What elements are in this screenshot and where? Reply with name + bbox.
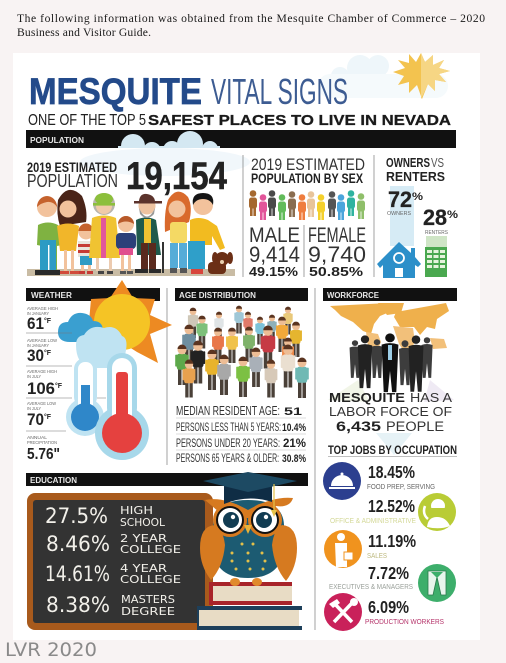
icon: suit jacket (418, 564, 456, 602)
weather statistics: °F (44, 317, 52, 325)
intro text: The following information was obtained from the Mesquite Chamber of Commerce – 2020 (17, 12, 485, 25)
chalkboard: 27.5% (45, 504, 108, 528)
chalkboard: MASTERS (121, 594, 175, 606)
job: office: OFFICE & ADMINISTRATIVE (330, 518, 416, 525)
title: MESQUITE (29, 71, 202, 112)
red thermometer (95, 353, 149, 460)
girl (116, 216, 136, 274)
books (197, 582, 302, 630)
weather statistics: AVERAGE LOW (27, 338, 58, 343)
age statistics (176, 404, 306, 465)
illustration: world map with workers: 6,435 (336, 419, 382, 434)
blue thermometer (66, 358, 104, 436)
panel: population by sex: 49.15% (249, 264, 298, 279)
job: sales: SALES (367, 553, 387, 560)
grandfather (134, 194, 164, 273)
chalkboard: SCHOOL (120, 517, 165, 529)
panel: owners vs renters: % (447, 209, 458, 221)
icon: salesperson with case (324, 530, 362, 568)
weather statistics: IN JANUARY (27, 343, 49, 348)
icon: hammer and wrench (324, 593, 362, 631)
intro text (17, 12, 485, 39)
illustration: world map with workers: PEOPLE (386, 419, 444, 434)
icons: small people row (249, 190, 365, 220)
job: food prep (323, 462, 435, 500)
chalkboard: 2 YEAR (120, 533, 167, 545)
illustration: world map with workers (328, 303, 454, 455)
faint triangles (328, 380, 454, 455)
woman in stripes (165, 192, 191, 273)
weather statistics: ANNUAL (27, 435, 47, 440)
world map (330, 303, 449, 356)
chalkboard: 8.38% (46, 593, 110, 617)
chalkboard: COLLEGE (120, 574, 181, 586)
woman in yellow (57, 190, 86, 274)
illustration: world map with workers: HAS A (410, 390, 452, 405)
panel: population by sex: POPULATION BY SEX (251, 171, 363, 186)
section bar: age distribution (175, 288, 308, 301)
intro text: Business and Visitor Guide. (17, 26, 151, 39)
subtitle (28, 112, 451, 129)
panel: population by sex: 50.85% (309, 264, 364, 279)
job: food prep: FOOD PREP, SERVING (367, 484, 435, 491)
man in yellow (188, 193, 225, 274)
panel: estimated population: POPULATION (27, 171, 118, 191)
panel: owners vs renters: OWNERS (387, 211, 412, 217)
job: executives: 7.72% (368, 563, 409, 583)
weather statistics: 61 (27, 314, 44, 333)
illustration: crowd of residents (175, 306, 309, 398)
illustration: sun, clouds, thermometers (58, 280, 172, 460)
job: production (324, 593, 444, 631)
chalkboard: 14.61% (45, 562, 110, 586)
panel: owners vs renters: % (412, 191, 423, 203)
age statistics: 51 (284, 406, 302, 418)
title: VITAL SIGNS (211, 71, 348, 112)
boy (78, 224, 94, 274)
icon: sun top right (393, 53, 450, 99)
illustration: owl on books (197, 472, 302, 630)
weather statistics (26, 306, 106, 463)
panel: owners vs renters (377, 155, 458, 278)
chalkboard: 8.46% (46, 532, 110, 556)
weather statistics: AVERAGE LOW (27, 401, 57, 406)
weather statistics: °F (55, 382, 63, 390)
age statistics: MEDIAN RESIDENT AGE: (176, 404, 280, 418)
weather statistics: 30 (27, 346, 44, 365)
section bar: workforce (323, 288, 457, 301)
job: sales: 11.19% (368, 531, 416, 551)
illustration: world map with workers: LABOR FORCE OF (329, 404, 452, 419)
section bar: weather (26, 288, 160, 301)
section bar: age distribution: AGE DISTRIBUTION (179, 291, 256, 300)
job: sales (324, 530, 416, 568)
weather statistics: 5.76" (27, 446, 60, 463)
weather statistics: °F (44, 349, 52, 357)
weather statistics: IN JULY (27, 406, 41, 411)
section bar: education: EDUCATION (30, 476, 77, 485)
age statistics: 30.8% (282, 453, 306, 465)
job: executives: EXECUTIVES & MANAGERS (329, 584, 413, 591)
age statistics: PERSONS UNDER 20 YEARS: (176, 436, 280, 450)
subtitle: SAFEST PLACES TO LIVE IN NEVADA (148, 112, 451, 129)
section bar: population: POPULATION (30, 136, 84, 145)
panel: owners vs renters: VS (431, 155, 444, 170)
age statistics: PERSONS LESS THAN 5 YEARS: (176, 420, 281, 434)
divider (167, 155, 374, 630)
panel: population by sex (249, 155, 366, 279)
weather statistics: IN JANUARY (27, 311, 49, 316)
owl spots (230, 542, 266, 570)
panel: owners vs renters: 72 (388, 187, 412, 212)
job: executives (329, 563, 456, 602)
icon: apartment building (425, 247, 447, 277)
age statistics: 21% (283, 438, 306, 450)
chalkboard: HIGH (120, 505, 153, 517)
footer: LVR 2020: LVR 2020 (5, 639, 97, 661)
man in green (35, 196, 62, 275)
section bar: weather: WEATHER (31, 291, 72, 300)
decorative clouds (80, 55, 448, 176)
graduation cap (203, 472, 297, 517)
job: office: 12.52% (368, 496, 415, 516)
panel: owners vs renters: RENTERS (425, 230, 449, 236)
panel: estimated population: 2019 ESTIMATED (27, 160, 117, 175)
panel: owners vs renters: RENTERS (386, 169, 445, 184)
job: food prep: 18.45% (368, 462, 415, 482)
icon: food cloche (323, 462, 361, 500)
job: production: PRODUCTION WORKERS (365, 619, 444, 626)
panel: population by sex: 2019 ESTIMATED (251, 155, 365, 174)
panel: population by sex: 9,414 (249, 242, 300, 267)
dog (208, 252, 233, 274)
age statistics: 10.4% (282, 422, 306, 434)
chalkboard (27, 493, 213, 630)
owl body (213, 500, 284, 578)
weather statistics: IN JULY (27, 374, 41, 379)
weather statistics: 106 (27, 379, 55, 398)
age statistics: PERSONS 65 YEARS & OLDER: (176, 451, 279, 465)
weather statistics: AVERAGE HIGH (27, 306, 58, 311)
illustration: world map with workers: MESQUITE (329, 390, 405, 405)
weather statistics: 70 (27, 410, 44, 429)
job: office (330, 493, 456, 531)
section bar: education (26, 473, 308, 486)
chalkboard: COLLEGE (120, 544, 181, 556)
icon: person with phone (418, 493, 456, 531)
heading: top jobs: TOP JOBS BY OCCUPATION (328, 443, 457, 457)
panel: owners vs renters: OWNERS (386, 155, 430, 170)
panel: owners vs renters: 28 (423, 205, 447, 230)
section bar: workforce: WORKFORCE (327, 291, 380, 300)
business people silhouettes (350, 333, 433, 392)
panel: estimated population (27, 155, 227, 198)
panel: population by sex: FEMALE (308, 224, 366, 247)
panel: population by sex: 9,740 (308, 242, 366, 267)
chalkboard: DEGREE (121, 606, 175, 618)
icon: house (377, 242, 421, 278)
chalkboard: 4 YEAR (120, 563, 167, 575)
illustration: family (27, 190, 235, 276)
section bar: population (26, 130, 456, 148)
owl eyes (213, 503, 282, 537)
title (29, 71, 348, 112)
job: production: 6.09% (368, 597, 409, 617)
weather statistics: °F (44, 413, 52, 421)
subtitle: ONE OF THE TOP 5 (28, 112, 146, 129)
panel: estimated population: 19,154 (126, 155, 227, 198)
panel: population by sex: MALE (249, 224, 300, 247)
weather statistics: AVERAGE HIGH (27, 369, 57, 374)
grandmother (89, 193, 120, 274)
weather statistics: PRECIPITATION (27, 440, 57, 445)
